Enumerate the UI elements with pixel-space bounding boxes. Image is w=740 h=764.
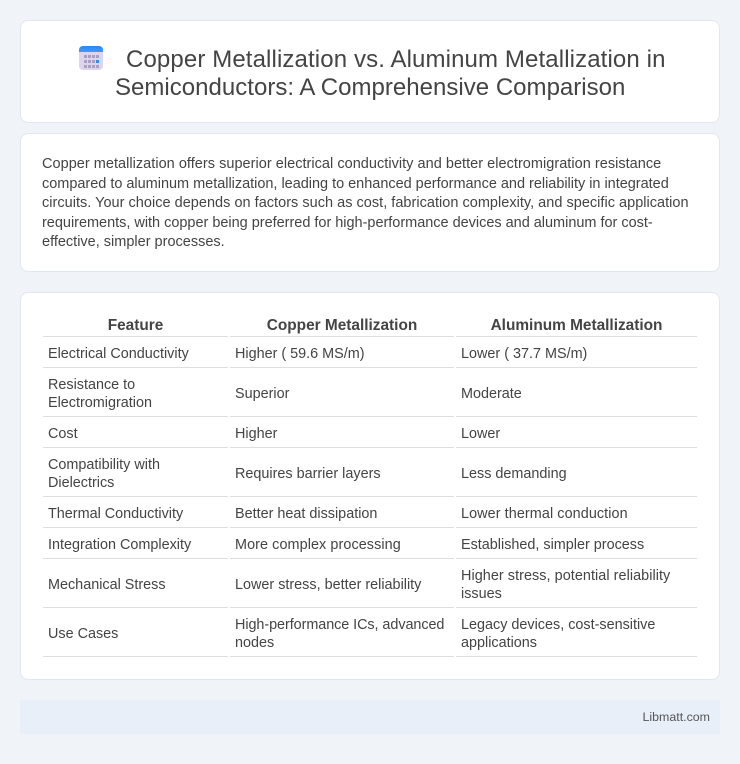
row: electrical conductivity xyxy=(48,346,587,362)
row: thermal conductivity: Better heat dissipation xyxy=(235,506,377,522)
row: use cases: nodes xyxy=(235,635,274,651)
panel: introduction xyxy=(20,133,720,272)
row: cost: Cost xyxy=(48,426,78,442)
panel: title header xyxy=(20,20,720,123)
row: compatibility with dielectrics: Compatibility with xyxy=(48,457,160,473)
title line 2: Semiconductors: A Comprehensive Comparison xyxy=(115,74,625,101)
row: thermal conductivity: Thermal Conductivity xyxy=(48,506,183,522)
row: use cases: Use Cases xyxy=(48,626,118,642)
row: electrical conductivity: Electrical Conductivity xyxy=(48,346,189,362)
intro text: circuits. Your choice depends on factors such as cost, fabrication complexity, and specific application xyxy=(42,195,689,211)
row: use cases xyxy=(48,617,655,651)
row: resistance to electromigration: Superior xyxy=(235,386,289,402)
intro text: requirements, with copper being preferred for high-performance devices and aluminum for cost- xyxy=(42,214,653,230)
row: integration complexity: Integration Complexity xyxy=(48,537,191,553)
row: use cases: High-performance ICs, advanced xyxy=(235,617,444,633)
row: compatibility with dielectrics: Requires barrier layers xyxy=(235,466,381,482)
row: integration complexity xyxy=(48,537,644,553)
table header: Aluminum Metallization xyxy=(491,317,662,334)
row: mechanical stress: Mechanical Stress xyxy=(48,577,166,593)
icon: calendar xyxy=(79,46,103,70)
row: use cases: applications xyxy=(461,635,537,651)
footer bar xyxy=(20,700,720,734)
row: resistance to electromigration xyxy=(48,377,522,411)
row: resistance to electromigration: Electromigration xyxy=(48,395,152,411)
row: resistance to electromigration: Resistance to xyxy=(48,377,135,393)
row: cost xyxy=(48,426,500,442)
row: compatibility with dielectrics: Less demanding xyxy=(461,466,567,482)
title line 1: Copper Metallization vs. Aluminum Metallization in xyxy=(126,46,666,73)
intro text: Copper metallization offers superior electrical conductivity and better electromigration resistance xyxy=(42,156,661,172)
panel: comparison table xyxy=(20,292,720,680)
row: thermal conductivity: Lower thermal conduction xyxy=(461,506,628,522)
table header: Feature xyxy=(108,317,163,334)
intro text: effective, simpler processes. xyxy=(42,234,225,250)
row: compatibility with dielectrics: Dielectrics xyxy=(48,475,114,491)
row: electrical conductivity: Lower ( 37.7 MS/m) xyxy=(461,346,587,362)
row: resistance to electromigration: Moderate xyxy=(461,386,522,402)
row: mechanical stress: Lower stress, better reliability xyxy=(235,577,421,593)
row: mechanical stress: Higher stress, potential reliability xyxy=(461,568,670,584)
intro text: compared to aluminum metallization, leading to enhanced performance and reliability in integrated xyxy=(42,176,669,192)
intro text xyxy=(42,156,689,250)
row: use cases: Legacy devices, cost-sensitive xyxy=(461,617,655,633)
row: cost: Higher xyxy=(235,426,277,442)
row: cost: Lower xyxy=(461,426,500,442)
row: thermal conductivity xyxy=(48,506,628,522)
footer text: Libmatt.com: Libmatt.com xyxy=(643,710,710,724)
row: electrical conductivity: Higher ( 59.6 MS/m) xyxy=(235,346,365,362)
row: compatibility with dielectrics xyxy=(48,457,567,491)
row: integration complexity: Established, simpler process xyxy=(461,537,644,553)
row: mechanical stress xyxy=(48,568,670,602)
row: integration complexity: More complex processing xyxy=(235,537,401,553)
table header xyxy=(108,317,662,334)
table header: Copper Metallization xyxy=(267,317,417,334)
row: mechanical stress: issues xyxy=(461,586,502,602)
